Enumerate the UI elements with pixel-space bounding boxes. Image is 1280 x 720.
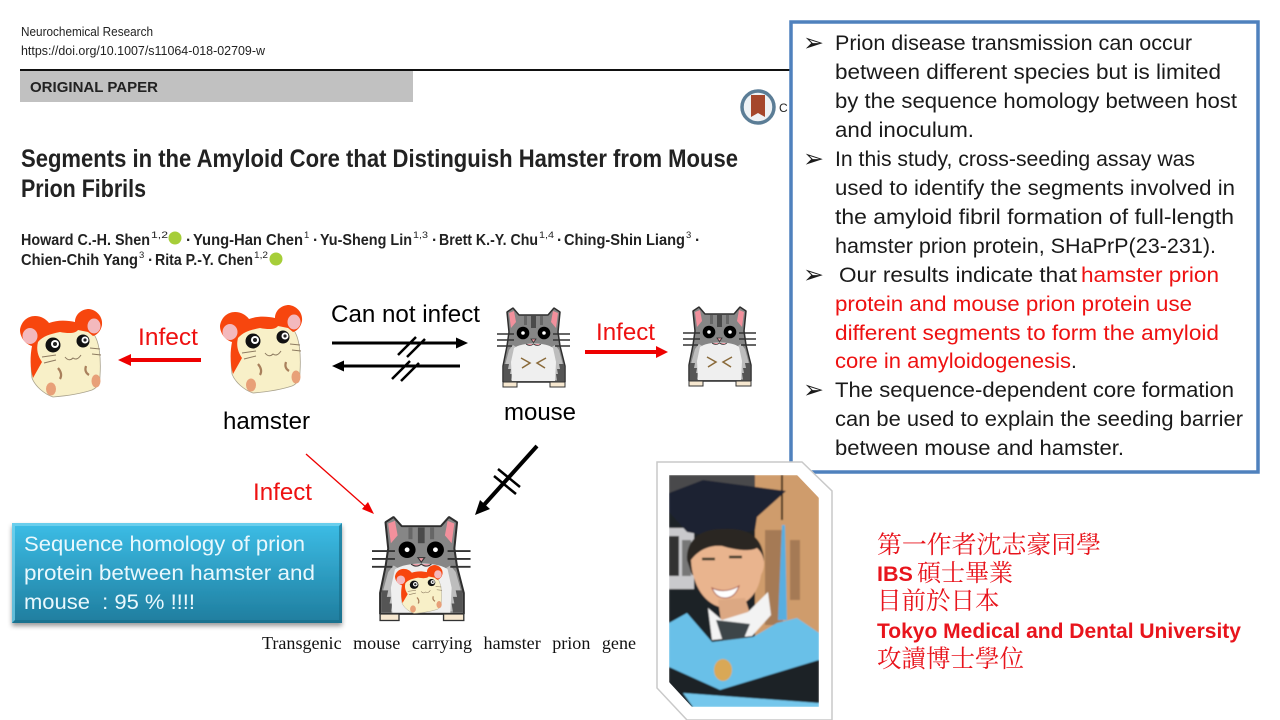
authors: Yu-Sheng Lin (320, 232, 412, 249)
bullet 4: between mouse and hamster. (835, 437, 1124, 460)
paper title: Prion Fibrils (21, 175, 146, 203)
icon: infected hamster (20, 309, 102, 397)
label: infect left: Infect (138, 324, 198, 351)
callout: sequence homology: mouse : 95 % !!!! (24, 591, 195, 614)
label: infect lower: Infect (253, 479, 312, 506)
authors: Yung-Han Chen (193, 232, 303, 249)
bullet 4: ➢ (803, 375, 824, 404)
paper title: Segments in the Amyloid Core that Distinguish Hamster from Mouse (21, 145, 738, 173)
authors: 1 (304, 230, 309, 241)
caption: transgenic mouse: Transgenic mouse carrying hamster prion gene (262, 633, 636, 653)
text block: first author note: 攻讀博士學位 (877, 645, 1024, 673)
original paper banner (20, 71, 413, 102)
icon: check for updates: C (779, 101, 788, 115)
panel: paper header (20, 25, 790, 269)
bullet 2: the amyloid fibril formation of full-length (835, 206, 1234, 229)
arrow: mouse blocked from transgenic mouse (475, 446, 537, 515)
journal name and DOI: Neurochemical Research (21, 25, 153, 39)
original paper banner: ORIGINAL PAPER (30, 79, 158, 96)
icon: source mouse (497, 308, 570, 387)
bullet 3: hamster prion (1081, 264, 1219, 287)
label: mouse: mouse (504, 399, 576, 426)
bullet 3: protein and mouse prion protein use (835, 293, 1192, 316)
bullet 3: different segments to form the amyloid (835, 322, 1219, 345)
panel: key findings (791, 22, 1258, 472)
callout: sequence homology (12, 523, 342, 623)
arrow: mouse infects mouse (585, 346, 668, 358)
bullet 3: core in amyloidogenesis (835, 350, 1071, 373)
authors: · (695, 232, 700, 249)
bullet 2 (803, 144, 1235, 258)
authors (21, 230, 700, 269)
text block: first author note: 碩士畢業 (917, 560, 1013, 587)
authors: Chien-Chih Yang (21, 252, 138, 269)
arrows: blocked transmission between species (332, 337, 468, 381)
callout: sequence homology: Sequence homology of prion (24, 533, 305, 556)
bullet 1: by the sequence homology between host (835, 90, 1237, 113)
text block: first author note: IBS (877, 562, 913, 586)
text block: first author note: 第一作者沈志豪同學 (877, 531, 1101, 559)
arrow: hamster infects transgenic mouse (306, 454, 374, 514)
authors: · (186, 232, 191, 249)
icon: source hamster (220, 305, 302, 393)
bullet 1: ➢ (803, 28, 824, 57)
authors: 1,3 (413, 230, 428, 241)
icon: check for updates (742, 91, 788, 123)
bullet 4 (803, 375, 1243, 460)
label: infect right: Infect (596, 319, 655, 346)
icon: transgenic mouse carrying hamster gene (372, 517, 471, 620)
icon: infected mouse (683, 307, 756, 386)
bullet 2: used to identify the segments involved in (835, 177, 1235, 200)
bullet 1 (803, 28, 1237, 142)
bullet 2: hamster prion protein, SHaPrP(23-231). (835, 235, 1216, 258)
text block: first author note: 目前於日本 (877, 587, 1000, 615)
bullet 1: Prion disease transmission can occur (835, 32, 1192, 55)
panel: infection diagram (20, 301, 756, 653)
authors: 3 (139, 250, 144, 261)
authors: 1,4 (539, 230, 554, 241)
bullet 1: between different species but is limited (835, 61, 1221, 84)
bullet 4: can be used to explain the seeding barrier (835, 408, 1243, 431)
photo: first author in graduation gown (657, 462, 832, 720)
bullet 4: The sequence-dependent core formation (835, 379, 1234, 402)
text block: first author note: Tokyo Medical and Dental University (877, 619, 1241, 643)
authors: Ching-Shin Liang (564, 232, 685, 249)
label: can not infect: Can not infect (331, 301, 480, 328)
authors: · (148, 252, 153, 269)
journal name and DOI (21, 25, 266, 58)
journal name and DOI: https://doi.org/10.1007/s11064-018-02709-w (21, 44, 266, 58)
text block: first author note (877, 531, 1241, 673)
authors: 1,2 (151, 230, 168, 241)
arrow: hamster infects hamster (118, 354, 201, 366)
authors: · (432, 232, 437, 249)
authors: · (313, 232, 318, 249)
bullet 1: and inoculum. (835, 119, 974, 142)
bullet 3: Our results indicate that (839, 264, 1077, 287)
authors: · (557, 232, 562, 249)
bullet 3 (803, 260, 1219, 373)
label: hamster: hamster (223, 408, 310, 435)
callout: sequence homology: protein between hamster and (24, 562, 315, 585)
authors: 1,2 (254, 250, 268, 261)
authors: 3 (686, 230, 691, 241)
authors: Brett K.-Y. Chu (439, 232, 538, 249)
bullet 2: ➢ (803, 144, 824, 173)
bullet 3: ➢ (803, 260, 824, 289)
bullet 2: In this study, cross-seeding assay was (835, 148, 1195, 171)
authors: Rita P.-Y. Chen (155, 252, 253, 269)
bullet 3: . (1071, 350, 1077, 373)
paper title (21, 145, 738, 203)
authors: Howard C.-H. Shen (21, 232, 150, 249)
